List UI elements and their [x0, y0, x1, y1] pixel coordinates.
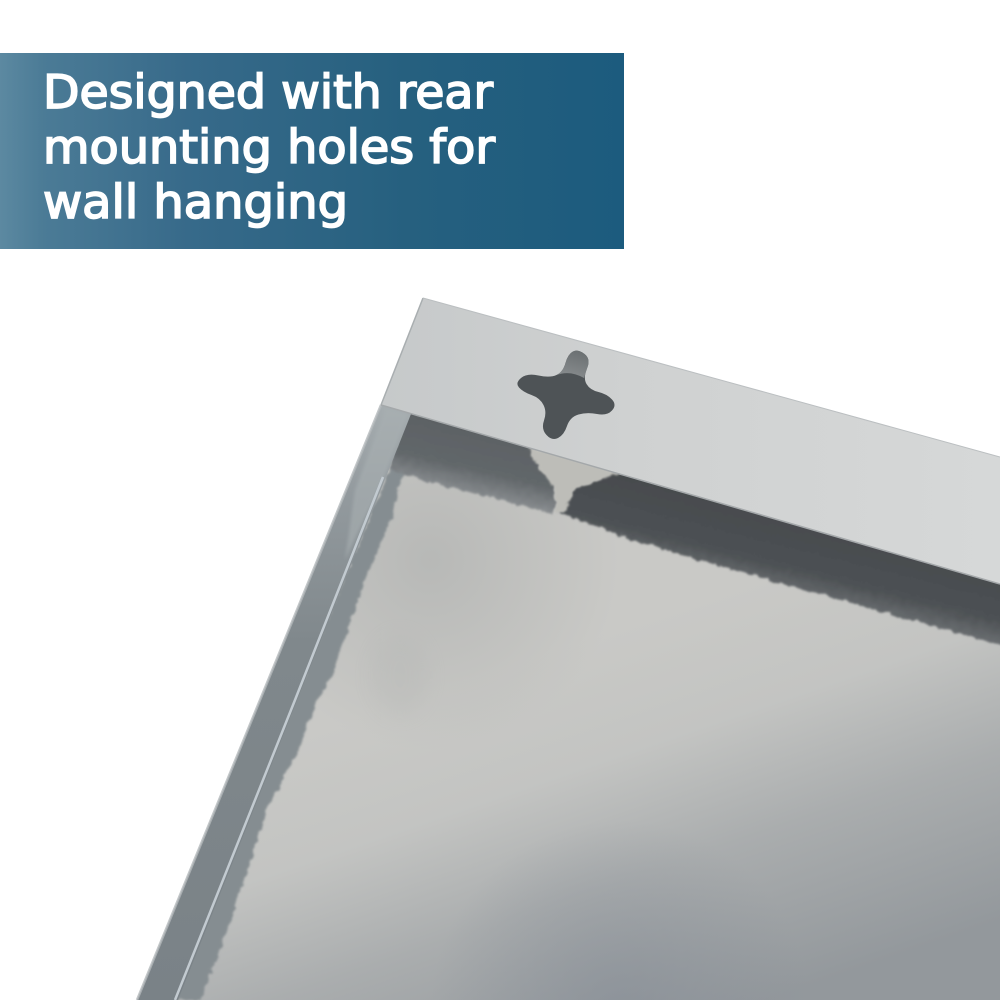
flange upper edge — [423, 298, 1000, 457]
left wall outer rim — [137, 405, 381, 1000]
banner — [0, 53, 624, 249]
icon: keyhole mounting slot — [517, 351, 614, 439]
heading: mounting holes for — [43, 120, 495, 174]
left dark reflection under flange — [390, 410, 556, 514]
upper-left floor tone — [352, 476, 532, 662]
right dark reflection under flange — [560, 468, 1000, 648]
left wall highlight line — [175, 477, 383, 1000]
left wall upper reflection — [345, 408, 408, 560]
lower shading blob — [526, 891, 684, 1000]
left wall — [137, 405, 411, 1000]
top flange — [381, 298, 1000, 584]
photo: metal panel rear — [137, 298, 1000, 1000]
flange lower edge — [381, 405, 1000, 584]
panel floor — [170, 405, 1000, 1000]
flange left edge — [381, 298, 423, 405]
left shadow band beside wall — [178, 463, 405, 1000]
heading: wall hanging — [43, 175, 348, 229]
heading: Designed with rear — [43, 65, 493, 119]
soft smudge — [372, 635, 428, 715]
banner background — [0, 53, 624, 249]
heading — [43, 65, 495, 229]
light reflection of mounting hole — [528, 447, 622, 514]
